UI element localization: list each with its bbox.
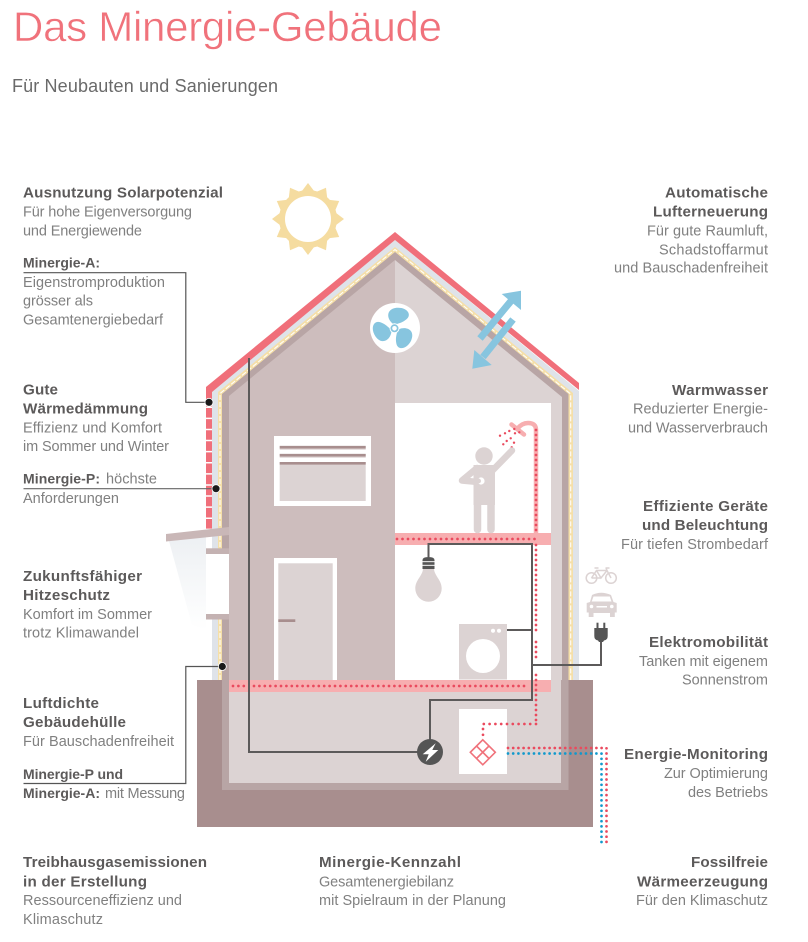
foundation xyxy=(197,680,593,827)
text: Treibhausgasemissionen: in der Erstellung xyxy=(23,874,147,890)
heated floor lower xyxy=(229,680,551,692)
icon: car xyxy=(587,593,617,617)
text: Gute Wärmedämmung: Gute xyxy=(23,381,58,398)
text: Automatische Lufterneuerung: und Bauschadenfreiheit xyxy=(614,261,768,277)
light cone under awning xyxy=(169,536,206,630)
icon: light bulb xyxy=(415,557,442,602)
text: Minergie-Kennzahl xyxy=(319,854,506,909)
text: Minergie-Kennzahl: mit Spielraum in der Planung xyxy=(319,893,506,909)
text: Effiziente Geräte und Beleuchtung: und Beleuchtung xyxy=(642,517,768,534)
text: Minergie-A xyxy=(23,255,165,328)
window with blinds xyxy=(274,436,371,506)
text: Effiziente Geräte und Beleuchtung: Für tiefen Strombedarf xyxy=(621,537,769,553)
text: Gute Wärmedämmung: Effizienz und Komfort xyxy=(23,420,162,436)
text: Zukunftsfähiger Hitzeschutz: Komfort im Sommer xyxy=(23,607,152,623)
roof and wall layers xyxy=(206,232,579,680)
text: Zukunftsfähiger Hitzeschutz: Zukunftsfähiger xyxy=(23,568,142,585)
text: Energie-Monitoring xyxy=(624,746,768,801)
callout line: Minergie-A to solar layer xyxy=(24,273,213,406)
text: Warmwasser xyxy=(628,382,768,436)
text: Elektromobilität: Tanken mit eigenem xyxy=(639,654,768,670)
icon: person showering xyxy=(462,447,512,530)
text: Minergie-P und Minergie-A: mit Messung xyxy=(105,786,185,802)
text: Fossilfreie Wärmeerzeugung: Fossilfreie xyxy=(691,854,768,871)
text: Minergie-P xyxy=(23,470,157,507)
text: Minergie-A: Eigenstromproduktion xyxy=(23,275,165,291)
text: Minergie-P: Anforderungen xyxy=(23,491,119,507)
text: Treibhausgasemissionen: Ressourceneffizienz und xyxy=(23,893,182,909)
electrical wiring xyxy=(249,358,601,752)
text: Elektromobilität xyxy=(639,634,768,689)
text: Effiziente Geräte und Beleuchtung: Effiziente Geräte xyxy=(643,498,768,515)
text: Minergie-P und Minergie-A: Minergie-P und xyxy=(23,766,123,782)
text: Treibhausgasemissionen xyxy=(23,854,207,928)
text: Warmwasser: und Wasserverbrauch xyxy=(628,420,768,436)
text: Energie-Monitoring: des Betriebs xyxy=(688,785,768,801)
icon: power circle xyxy=(417,739,443,765)
text: Ausnutzung Solarpotenzial xyxy=(23,185,223,239)
door xyxy=(274,558,337,680)
text: Energie-Monitoring: Zur Optimierung xyxy=(664,766,768,782)
text: Gute Wärmedämmung: Wärmedämmung xyxy=(23,400,148,418)
text: Ausnutzung Solarpotenzial: Ausnutzung Solarpotenzial xyxy=(23,185,223,202)
text: Warmwasser: Warmwasser xyxy=(672,382,768,399)
subtitle: Für Neubauten und Sanierungen xyxy=(12,76,278,96)
text: Elektromobilität: Sonnenstrom xyxy=(682,673,768,689)
title: Das Minergie-Gebäude xyxy=(13,3,442,50)
dotted monitoring lines xyxy=(508,748,606,842)
text: Minergie-Kennzahl: Minergie-Kennzahl xyxy=(319,854,461,871)
text: Energie-Monitoring: Energie-Monitoring xyxy=(624,746,768,763)
heated floor upper xyxy=(395,533,551,545)
text: Fossilfreie Wärmeerzeugung xyxy=(636,854,768,909)
text: Automatische Lufterneuerung: Lufterneuerung xyxy=(653,204,768,221)
text: Minergie-A: grösser als xyxy=(23,294,93,310)
text: Ausnutzung Solarpotenzial: Für hohe Eigenversorgung xyxy=(23,205,192,221)
shaded window box xyxy=(206,548,229,620)
text: Luftdichte Gebäudehülle: Für Bauschadenfreiheit xyxy=(23,734,174,750)
text: Treibhausgasemissionen: Treibhausgasemissionen xyxy=(23,854,207,871)
text: Minergie-P und Minergie-A: Minergie-A: xyxy=(23,785,100,801)
icon: fan xyxy=(369,303,420,353)
text: Gute Wärmedämmung: im Sommer und Winter xyxy=(23,439,169,455)
text: Gute Wärmedämmung xyxy=(23,381,169,455)
text: Fossilfreie Wärmeerzeugung: Wärmeerzeugung xyxy=(637,874,768,890)
text: Minergie-P: höchste xyxy=(106,471,157,487)
text: Effiziente Geräte und Beleuchtung xyxy=(621,498,769,553)
text: Automatische Lufterneuerung: Automatische xyxy=(665,185,768,202)
text: Zukunftsfähiger Hitzeschutz xyxy=(23,568,152,642)
text: Automatische Lufterneuerung: Für gute Raumluft, xyxy=(647,224,768,240)
shower pipe xyxy=(499,423,536,533)
white room xyxy=(395,403,551,680)
text: Zukunftsfähiger Hitzeschutz: trotz Klimawandel xyxy=(23,626,139,642)
icon: bicycle xyxy=(586,568,616,583)
text: Fossilfreie Wärmeerzeugung: Für den Klimaschutz xyxy=(636,893,768,909)
text: Treibhausgasemissionen: Klimaschutz xyxy=(23,912,103,928)
icon: plug xyxy=(594,623,608,642)
house cross-section xyxy=(166,232,606,842)
icon: sun xyxy=(272,183,344,255)
text: Automatische Lufterneuerung xyxy=(614,185,768,277)
text: Minergie-Kennzahl: Gesamtenergiebilanz xyxy=(319,874,454,890)
awning xyxy=(166,527,229,542)
callout line: airtight envelope xyxy=(24,662,226,784)
text: Ausnutzung Solarpotenzial: und Energiewende xyxy=(23,223,142,239)
text: Minergie-P und Minergie-A xyxy=(23,766,185,802)
text: Minergie-P: Minergie-P: xyxy=(23,470,100,486)
text: Elektromobilität: Elektromobilität xyxy=(649,634,768,651)
text: Automatische Lufterneuerung: Schadstoffarmut xyxy=(659,242,768,258)
callout line: Minergie-P to insulation xyxy=(24,485,220,493)
text: Luftdichte Gebäudehülle: Luftdichte xyxy=(23,695,99,712)
text: Luftdichte Gebäudehülle: Gebäudehülle xyxy=(23,714,126,731)
arrows: air exchange xyxy=(472,291,521,369)
energy monitoring box with Minergie diamond xyxy=(459,709,507,774)
text: Luftdichte Gebäudehülle xyxy=(23,695,174,750)
text: Minergie-A: Minergie-A: xyxy=(23,255,100,271)
dotted hot water line xyxy=(483,545,536,740)
text: Minergie-A: Gesamtenergiebedarf xyxy=(23,312,164,328)
icon: washing machine xyxy=(459,624,507,680)
text: Warmwasser: Reduzierter Energie- xyxy=(633,402,768,418)
text: Zukunftsfähiger Hitzeschutz: Hitzeschutz xyxy=(23,587,110,604)
